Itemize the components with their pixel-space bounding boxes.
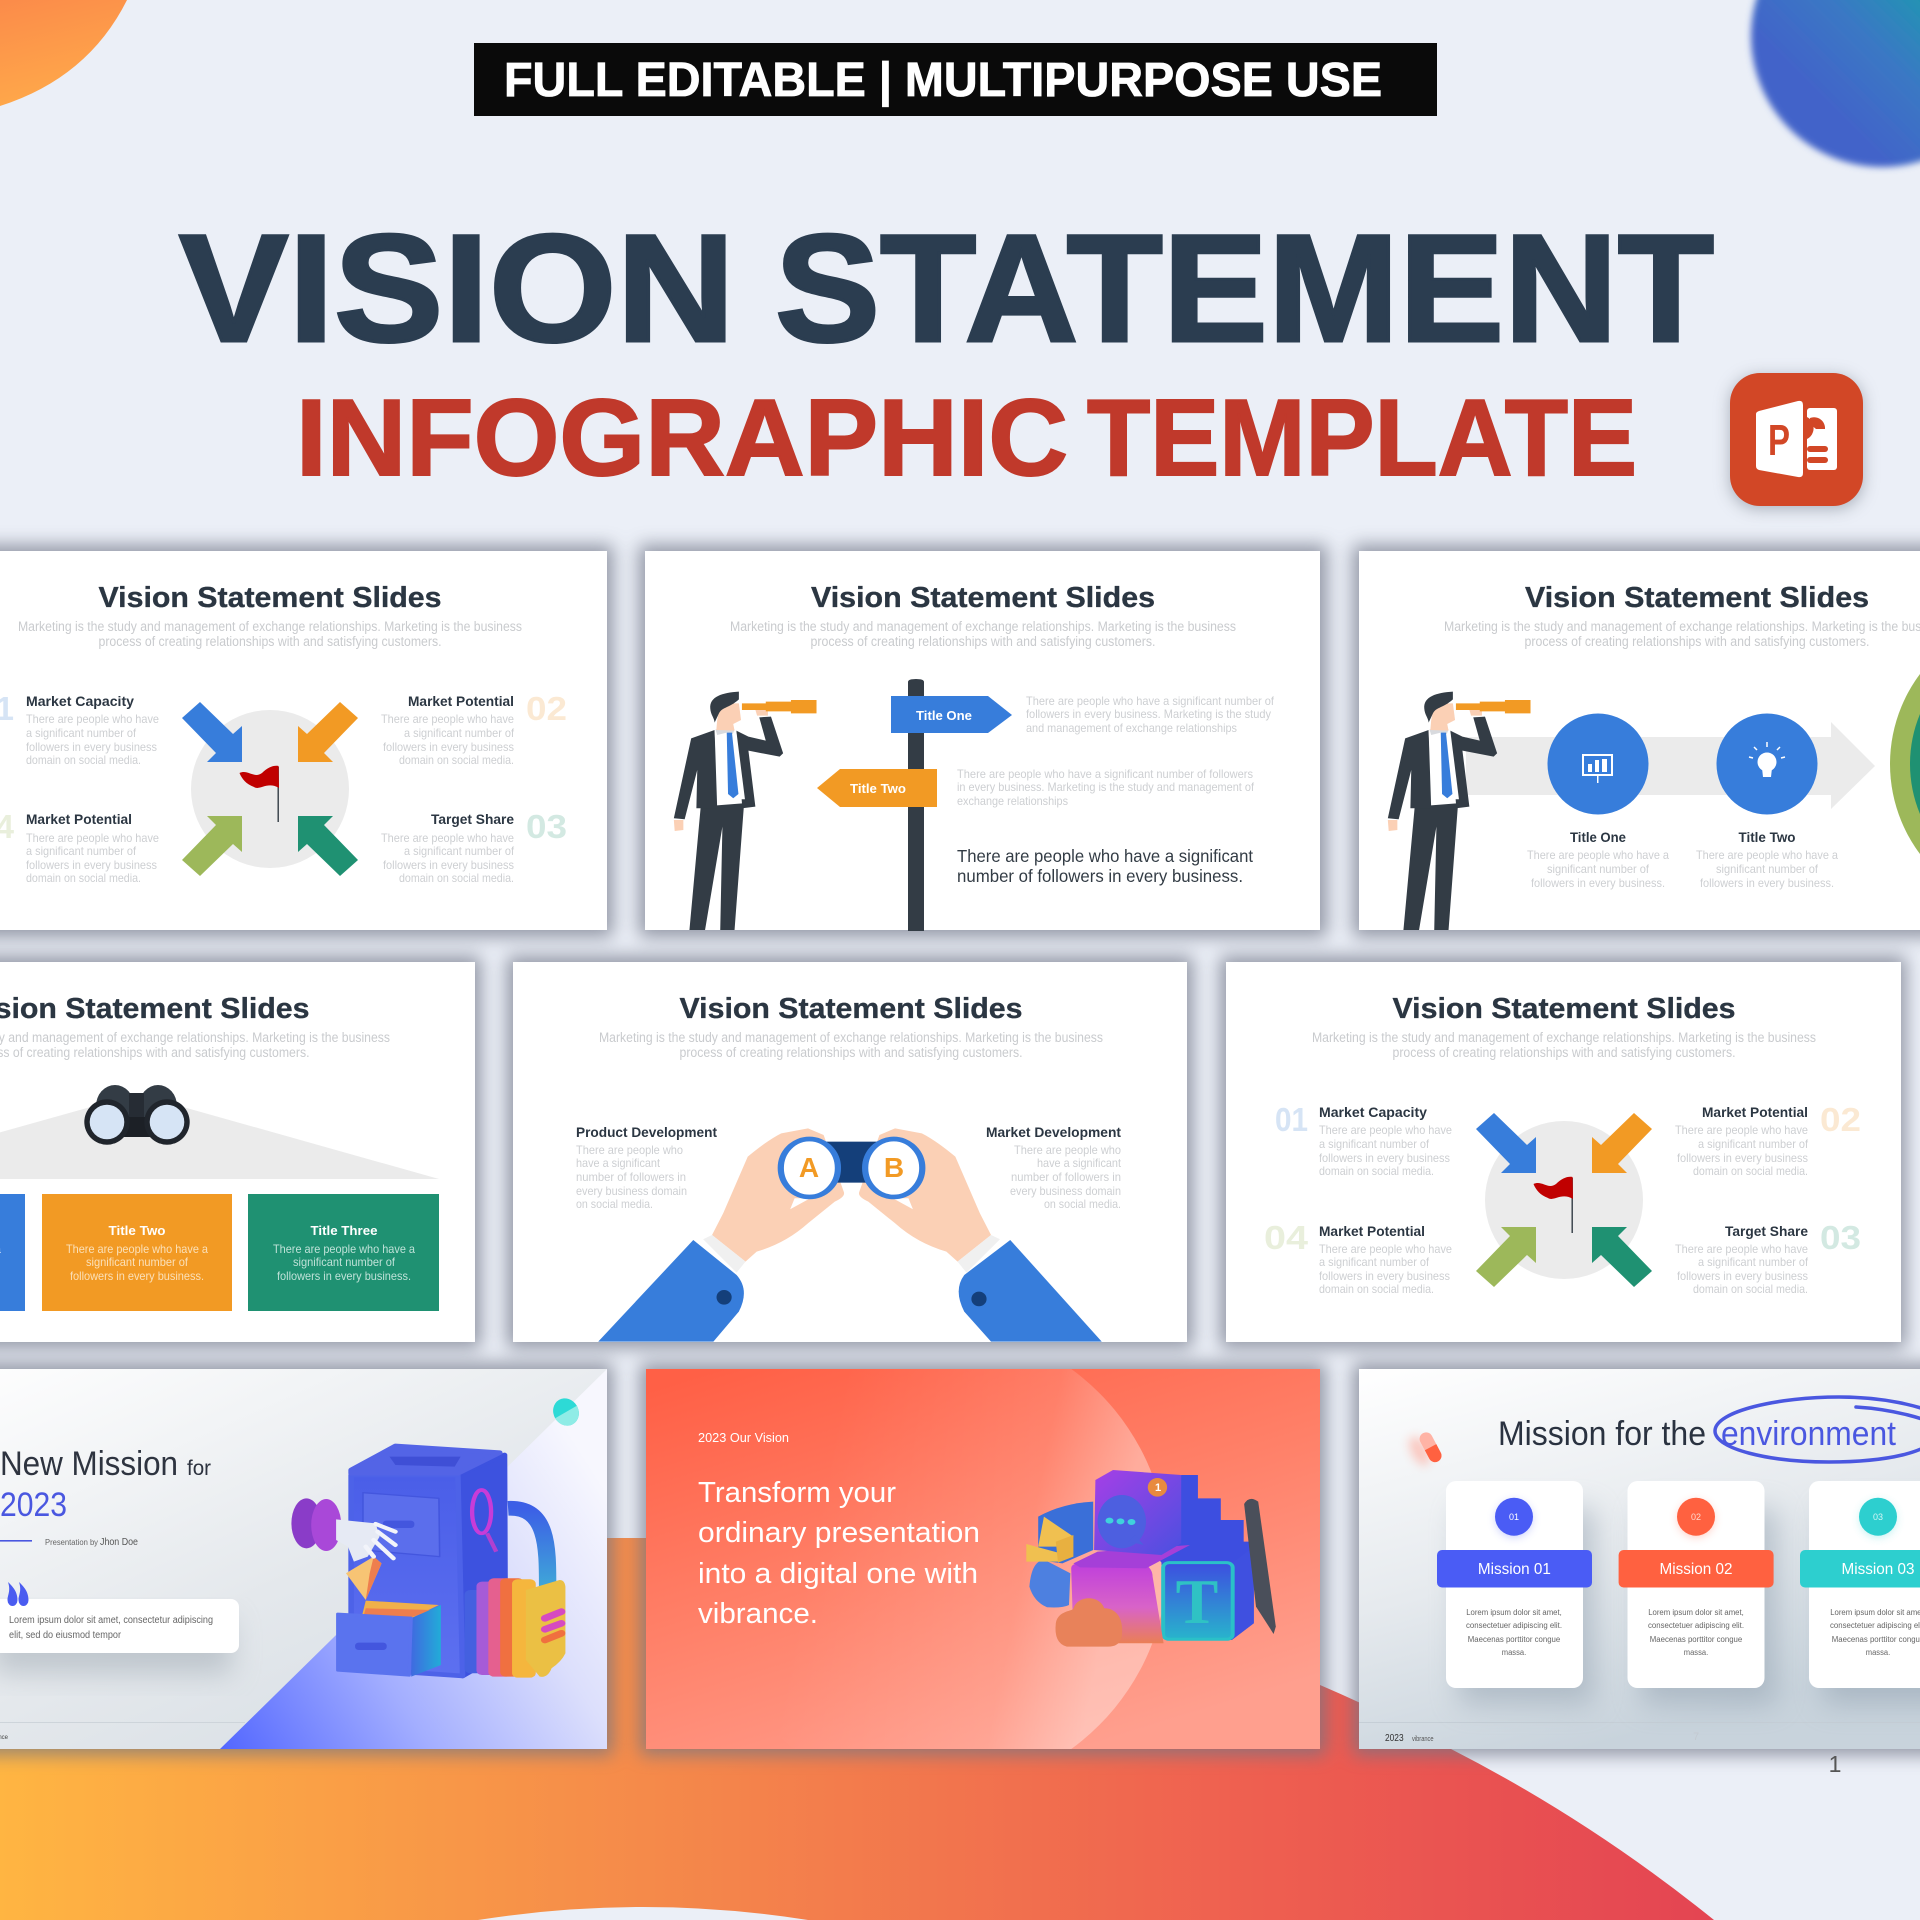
slide description	[18, 619, 522, 649]
main message: into a digital one with	[698, 1558, 978, 1590]
slide heading: Vision Statement Slides	[811, 582, 1155, 614]
market development text: Market Development	[986, 1124, 1121, 1140]
product development text: There are people who	[576, 1143, 683, 1157]
card: mission 02: Maecenas porttitor congue	[1650, 1635, 1743, 1644]
column: title two: significant number of	[1716, 862, 1819, 876]
market development text	[986, 1124, 1122, 1211]
item 04	[0, 814, 158, 882]
card: mission 01: Lorem ipsum dolor sit amet,	[1466, 1608, 1562, 1617]
banner: full editable	[474, 43, 1437, 116]
product development text: number of followers in	[576, 1170, 686, 1184]
sign: title one: Title One	[916, 708, 972, 723]
eyebrow text: 2023 Our Vision	[698, 1430, 789, 1445]
item 03: followers in every business	[1677, 1269, 1808, 1283]
card: mission 01: consectetuer adipiscing elit.	[1466, 1621, 1562, 1630]
item 01: followers in every business	[1319, 1151, 1450, 1165]
icon: powerpoint	[1730, 373, 1863, 509]
item 03: a significant number of	[404, 844, 515, 858]
item 02: Market Potential	[408, 693, 514, 709]
column: title two: followers in every business.	[1700, 876, 1834, 890]
heading: Mission for the	[1498, 1415, 1706, 1453]
card: mission 01	[1437, 1481, 1594, 1704]
illustration: filing cabinet	[291, 1446, 565, 1678]
main message: ordinary presentation	[698, 1517, 980, 1549]
slide 9: mission for the environment	[1359, 1369, 1920, 1749]
slide heading: Vision Statement Slides	[1525, 582, 1869, 614]
pill: red	[1405, 1428, 1444, 1471]
title: vision statement	[179, 203, 1714, 374]
item 03: There are people who have	[381, 831, 514, 845]
market development text: on social media.	[1044, 1197, 1121, 1211]
circle: chart icon	[1548, 714, 1648, 814]
box: title one	[0, 1194, 25, 1311]
column: title one: There are people who have a	[1527, 848, 1669, 862]
market development text: every business domain	[1010, 1184, 1121, 1198]
footer brand	[1385, 1733, 1434, 1744]
box: title three: followers in every business.	[277, 1269, 411, 1283]
item 01	[0, 696, 158, 764]
item 03: a significant number of	[1698, 1255, 1809, 1269]
sign: title one	[891, 696, 1012, 733]
card: mission 01: massa.	[1502, 1648, 1526, 1657]
paragraph two	[957, 767, 1255, 808]
item 03: 03	[526, 808, 567, 845]
lens letter A: A	[799, 1152, 819, 1183]
item 02: a significant number of	[404, 726, 515, 740]
item 04: 04	[1264, 1219, 1309, 1256]
item 04: followers in every business	[26, 858, 157, 872]
box: title two	[42, 1194, 232, 1311]
slide description: process of creating relationships with and satisfying customers.	[810, 634, 1156, 649]
T letter on cube: T	[1176, 1566, 1218, 1637]
item 01: domain on social media.	[1319, 1164, 1434, 1178]
main message	[698, 1477, 980, 1630]
main message: vibrance.	[698, 1598, 818, 1630]
diagram: circle with four arrows and flag	[182, 702, 358, 876]
figure: man with telescope	[674, 692, 817, 930]
slide shadows	[0, 545, 1920, 1755]
item 03: Target Share	[431, 811, 514, 827]
item 04: There are people who have	[1319, 1242, 1452, 1256]
card: mission 01: Mission 01	[1478, 1561, 1551, 1578]
heading: year: 2023	[0, 1486, 67, 1524]
card: mission 03: 03	[1873, 1512, 1883, 1522]
icon: binoculars	[84, 1085, 190, 1145]
item 04: a significant number of	[26, 844, 137, 858]
diagonal panel	[220, 1369, 607, 1749]
column: title one: Title One	[1570, 829, 1626, 845]
footer brand: 2023	[1385, 1733, 1404, 1744]
illustration: 3d blocks	[1026, 1470, 1276, 1647]
market development text: number of followers in	[1011, 1170, 1121, 1184]
column: title two	[1696, 829, 1838, 890]
item 02: Market Potential	[1702, 1104, 1808, 1120]
bottom gradient shape	[0, 1538, 1714, 1920]
card: mission 02: Mission 02	[1660, 1561, 1733, 1578]
card: mission 03	[1800, 1481, 1920, 1704]
item 03: followers in every business	[383, 858, 514, 872]
product development text: on social media.	[576, 1197, 653, 1211]
card: mission 01: 01	[1509, 1512, 1519, 1522]
item 04: There are people who have	[26, 831, 159, 845]
slide 1: market arrows	[0, 551, 607, 930]
item 04: domain on social media.	[1319, 1282, 1434, 1296]
item 04	[1266, 1226, 1452, 1293]
banner: full editable: FULL EDITABLE | MULTIPURPOSE USE	[504, 54, 1382, 107]
lens letter B: B	[884, 1152, 904, 1183]
presenter line: Jhon Doe	[100, 1537, 138, 1548]
slide description: process of creating relationships with and satisfying customers.	[680, 1045, 1022, 1060]
notification number: 1	[1155, 1482, 1161, 1494]
item 02: domain on social media.	[1693, 1164, 1808, 1178]
item 01: 01	[1275, 1101, 1308, 1138]
subtitle: infographic template: TEMPLATE	[1087, 377, 1637, 499]
paragraph two: exchange relationships	[957, 794, 1068, 808]
column: title two: Title Two	[1738, 829, 1796, 845]
signpost pole	[908, 679, 924, 931]
footer brand: vibrance	[1412, 1736, 1434, 1743]
slide heading: Vision Statement Slides	[1392, 993, 1736, 1025]
circle: bulb icon	[1716, 714, 1818, 814]
diagram: circle with four arrows and flag	[1476, 1113, 1652, 1287]
page number: 7	[1693, 1731, 1699, 1743]
slide heading: Vision Statement Slides	[98, 582, 442, 614]
slide description: process of creating relationships with and satisfying customers.	[1392, 1045, 1736, 1060]
corner circle: blue	[1751, 0, 1920, 167]
slide description	[0, 1030, 390, 1060]
slide description	[1312, 1030, 1816, 1060]
title: vision statement: VISION	[179, 203, 735, 374]
item 04: Market Potential	[26, 811, 132, 827]
slide description	[730, 619, 1236, 649]
quote card: Lorem ipsum dolor sit amet, consectetur adipiscing	[9, 1615, 213, 1626]
column: title one	[1527, 829, 1669, 890]
column: title one: followers in every business.	[1531, 876, 1665, 890]
item 03: domain on social media.	[1693, 1282, 1808, 1296]
card: mission 02: Lorem ipsum dolor sit amet,	[1648, 1608, 1744, 1617]
slide description: Marketing is the study and management of exchange relationships. Marketing is the business	[599, 1030, 1103, 1045]
illustration: hands holding binoculars	[598, 1128, 1102, 1342]
quote card	[0, 1582, 239, 1674]
product development text	[576, 1124, 717, 1211]
paragraph one: followers in every business. Marketing is the study	[1026, 707, 1271, 721]
item 04: domain on social media.	[26, 871, 141, 885]
slide description: Marketing is the study and management of exchange relationships. Marketing is the business	[18, 619, 522, 634]
grey arrow	[1466, 722, 1875, 809]
footer line	[1359, 1722, 1920, 1723]
item 02: domain on social media.	[399, 753, 514, 767]
item 03: 03	[1820, 1219, 1861, 1256]
heading: environment	[1721, 1415, 1897, 1453]
market development text: have a significant	[1037, 1156, 1122, 1170]
box: title three: Title Three	[310, 1223, 378, 1238]
heading	[1498, 1415, 1897, 1453]
item 02: 02	[526, 690, 567, 727]
icon: powerpoint: P	[1768, 416, 1790, 465]
item 02: a significant number of	[1698, 1137, 1809, 1151]
item 01: a significant number of	[1319, 1137, 1430, 1151]
item 03: There are people who have	[1675, 1242, 1808, 1256]
card: mission 02: massa.	[1684, 1648, 1708, 1657]
box: title two: Title Two	[108, 1223, 166, 1238]
item 02: 02	[1820, 1101, 1861, 1138]
item 01: Market Capacity	[1319, 1104, 1427, 1120]
slide 4: binoculars	[0, 962, 475, 1342]
slide heading: Vision Statement Slides	[680, 993, 1023, 1025]
item 02: There are people who have	[381, 712, 514, 726]
card: mission 03: massa.	[1866, 1648, 1890, 1657]
item 01	[1276, 1107, 1452, 1175]
page number: 1	[1829, 1751, 1841, 1777]
product development text: Product Development	[576, 1124, 717, 1140]
item 01: There are people who have	[1319, 1123, 1452, 1137]
slide description	[1444, 619, 1920, 649]
product development text: have a significant	[576, 1156, 661, 1170]
sign: title two	[817, 769, 937, 807]
item 04: a significant number of	[1319, 1255, 1430, 1269]
presenter line: Presentation by	[45, 1538, 98, 1547]
heading: new mission: for	[187, 1457, 211, 1480]
card: mission 02	[1619, 1481, 1776, 1704]
item 02: followers in every business	[1677, 1151, 1808, 1165]
box: title two: followers in every business.	[70, 1269, 204, 1283]
figure: man with telescope	[1388, 692, 1531, 930]
heading: new mission: New Mission	[0, 1445, 178, 1483]
card: mission 03: Mission 03	[1842, 1561, 1915, 1578]
slide 6: market arrows	[1226, 962, 1901, 1342]
callout text	[957, 846, 1253, 886]
item 03	[381, 814, 566, 882]
item 02: There are people who have	[1675, 1123, 1808, 1137]
slide description: process of creating relationships with and satisfying customers.	[98, 634, 442, 649]
card: mission 02: 02	[1691, 1512, 1701, 1522]
market development text: There are people who	[1014, 1143, 1121, 1157]
item 02: followers in every business	[383, 740, 514, 754]
item 03: Target Share	[1725, 1223, 1808, 1239]
subtitle: infographic template	[296, 377, 1637, 499]
slide 5: hands with AB binoculars	[513, 962, 1187, 1342]
item 01: Market Capacity	[26, 693, 134, 709]
slide 3: arrow with circles	[1359, 551, 1920, 930]
corner circle: orange	[0, 0, 127, 106]
item 04: followers in every business	[1319, 1269, 1450, 1283]
item 01: There are people who have	[26, 712, 159, 726]
slide description: Marketing is the study and management of exchange relationships. Marketing is the business	[1312, 1030, 1816, 1045]
callout text: number of followers in every business.	[957, 866, 1243, 886]
product development text: every business domain	[576, 1184, 687, 1198]
pill: teal	[548, 1394, 584, 1430]
box: title three: significant number of	[293, 1255, 396, 1269]
scribble oval	[1715, 1397, 1920, 1462]
item 01: followers in every business	[26, 740, 157, 754]
paragraph two: in every business. Marketing is the study and management of	[957, 780, 1255, 794]
callout text: There are people who have a significant	[957, 846, 1253, 866]
grey triangle	[0, 1094, 439, 1179]
slide description	[599, 1030, 1103, 1060]
slide 2: signpost	[645, 551, 1321, 931]
box: title two: significant number of	[86, 1255, 189, 1269]
target circle	[1890, 614, 1920, 914]
item 02	[1675, 1107, 1860, 1175]
item 03	[1675, 1219, 1861, 1296]
main message: Transform your	[698, 1477, 896, 1509]
subtitle: infographic template: INFOGRAPHIC	[296, 377, 1068, 499]
box: title two: There are people who have a	[66, 1242, 208, 1256]
item 02	[381, 696, 566, 764]
box: title three: There are people who have a	[273, 1242, 415, 1256]
paragraph one	[1026, 694, 1275, 735]
item 04: Market Potential	[1319, 1223, 1425, 1239]
footer line	[0, 1722, 245, 1723]
item 03: domain on social media.	[399, 871, 514, 885]
slide 7: new mission	[0, 1369, 607, 1749]
presenter line	[0, 1537, 138, 1548]
card: mission 02: consectetuer adipiscing elit.	[1648, 1621, 1744, 1630]
slide 8: our vision	[646, 1324, 1320, 1794]
card: mission 01: Maecenas porttitor congue	[1468, 1635, 1561, 1644]
slide description: Marketing is the study and management of exchange relationships. Marketing is the business	[730, 619, 1236, 634]
item 01: a significant number of	[26, 726, 137, 740]
box: title three	[248, 1194, 439, 1311]
quote card: elit, sed do eiusmod tempor	[9, 1630, 122, 1641]
item 01: domain on social media.	[26, 753, 141, 767]
column: title two: There are people who have a	[1696, 848, 1838, 862]
sign: title two: Title Two	[850, 781, 906, 796]
paragraph one: and management of exchange relationships	[1026, 721, 1237, 735]
paragraph two: There are people who have a significant number of followers	[957, 767, 1253, 781]
slide description: process of creating relationships with and satisfying customers.	[1524, 634, 1870, 649]
title: vision statement: STATEMENT	[775, 203, 1714, 374]
column: title one: significant number of	[1547, 862, 1650, 876]
paragraph one: There are people who have a significant number of	[1026, 694, 1275, 708]
large soft circle	[698, 1324, 1168, 1794]
